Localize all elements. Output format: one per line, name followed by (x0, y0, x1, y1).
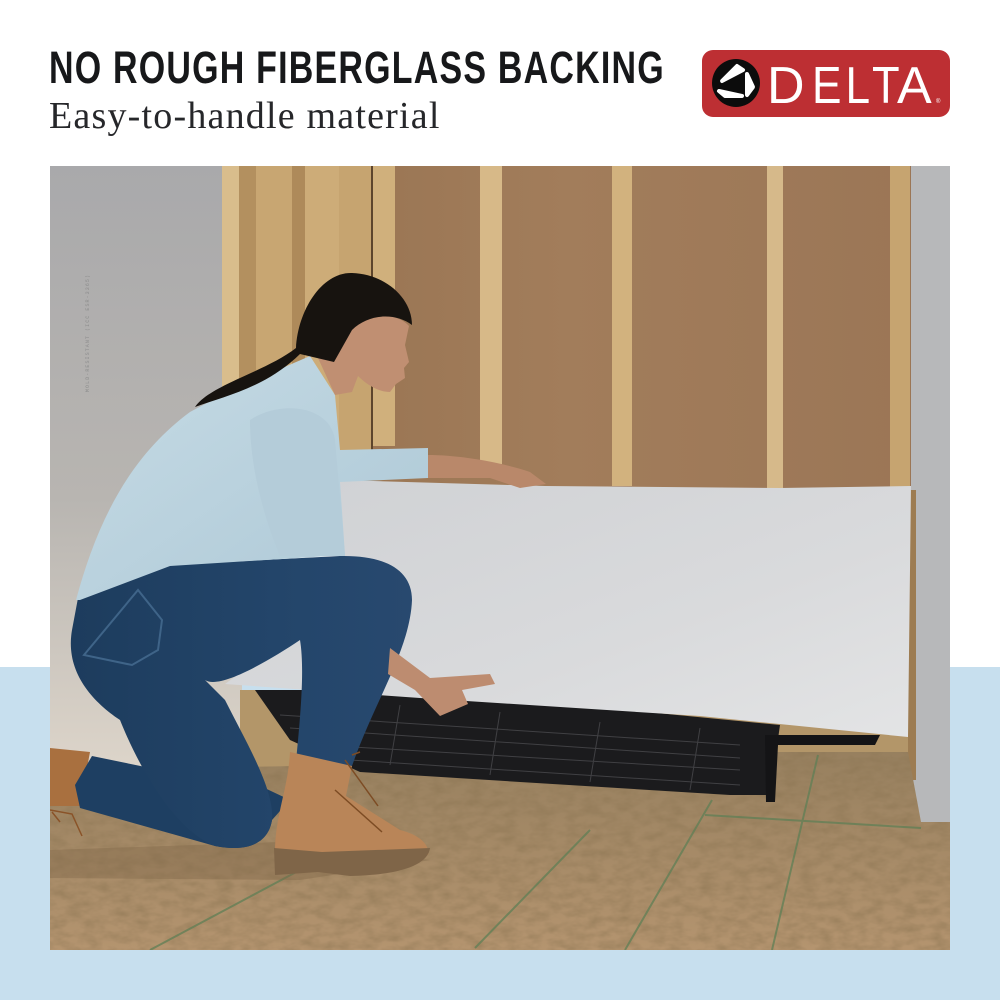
brown wall boards (222, 166, 912, 496)
photo: woman lifting bathtub apron against framed wall (50, 166, 950, 950)
light blue background band (0, 667, 1000, 1000)
drywall markings: MOLD-RESISTANT (ICC ESR-3365) (85, 275, 91, 392)
drywall left (50, 166, 242, 770)
floor shadow (50, 842, 430, 880)
wood studs (222, 166, 910, 488)
logo wordmark: A (897, 57, 932, 115)
logo wordmark: D (767, 57, 805, 115)
logo wordmark (767, 57, 932, 115)
boot laces (335, 752, 382, 832)
logo wordmark: L (846, 57, 870, 115)
boot sole (274, 848, 430, 876)
logo: Delta (702, 50, 950, 117)
registered mark: ® (936, 98, 941, 105)
logo wordmark: E (812, 57, 841, 115)
front boot (275, 752, 428, 855)
icon: Delta triangle mark (712, 59, 760, 107)
jeans main (71, 556, 412, 848)
floor chalk lines (150, 755, 921, 950)
lower arm and hand (388, 648, 495, 716)
black tub base grid (255, 690, 880, 802)
subtitle: Easy-to-handle material (49, 95, 441, 137)
shirt sleeve shadow (250, 408, 345, 556)
woman figure (50, 273, 546, 876)
wood plate behind tub (240, 690, 910, 770)
jeans lower leg (75, 755, 320, 848)
white tub apron (225, 480, 911, 737)
osb floor (50, 750, 950, 950)
title: NO ROUGH FIBERGLASS BACKING (49, 42, 665, 93)
shirt body (76, 356, 428, 600)
back boot (50, 748, 90, 806)
jeans pocket (84, 590, 162, 665)
upper arm skin (428, 455, 546, 488)
boot lace (50, 810, 82, 836)
logo wordmark: T (872, 57, 900, 115)
face and neck (318, 315, 409, 395)
hair (195, 273, 412, 407)
drywall right (911, 166, 950, 822)
